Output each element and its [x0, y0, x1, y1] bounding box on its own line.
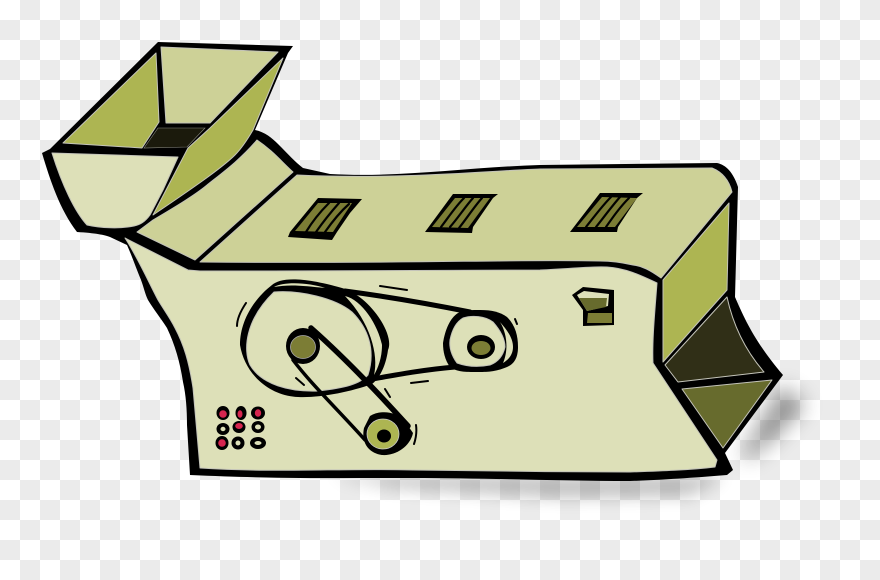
switch: [572, 287, 614, 326]
side olive panel: [663, 203, 729, 362]
crank top hub: [286, 328, 320, 364]
sloped chute panel: [137, 140, 293, 260]
small pulley crescent: [500, 322, 513, 363]
motion marks: [237, 286, 517, 444]
large pulley crescent: [274, 283, 382, 375]
large pulley: [240, 279, 389, 397]
hopper: [52, 47, 283, 228]
belt: [345, 291, 470, 381]
crank bottom wheel: [363, 412, 413, 455]
top panel: [200, 168, 732, 278]
hopper dark opening: [144, 128, 205, 148]
machine black outline silhouette: [42, 42, 783, 481]
hopper front face: [52, 153, 178, 228]
drop shadow: [330, 385, 805, 498]
hopper right inner wall: [153, 58, 283, 215]
front panel: [125, 238, 717, 472]
control button grid: [216, 406, 266, 450]
crank arm: [311, 328, 408, 426]
dark discharge opening: [665, 297, 764, 382]
small pulley: [443, 310, 518, 372]
pulley and belt assembly: [237, 279, 518, 455]
vent 1: [288, 198, 362, 240]
vent 2: [425, 194, 498, 233]
small pulley hub: [467, 335, 495, 359]
hopper back inner wall: [161, 47, 278, 123]
discharge chute: [682, 380, 772, 448]
hopper left inner wall: [63, 53, 159, 148]
vent 3: [570, 193, 643, 232]
